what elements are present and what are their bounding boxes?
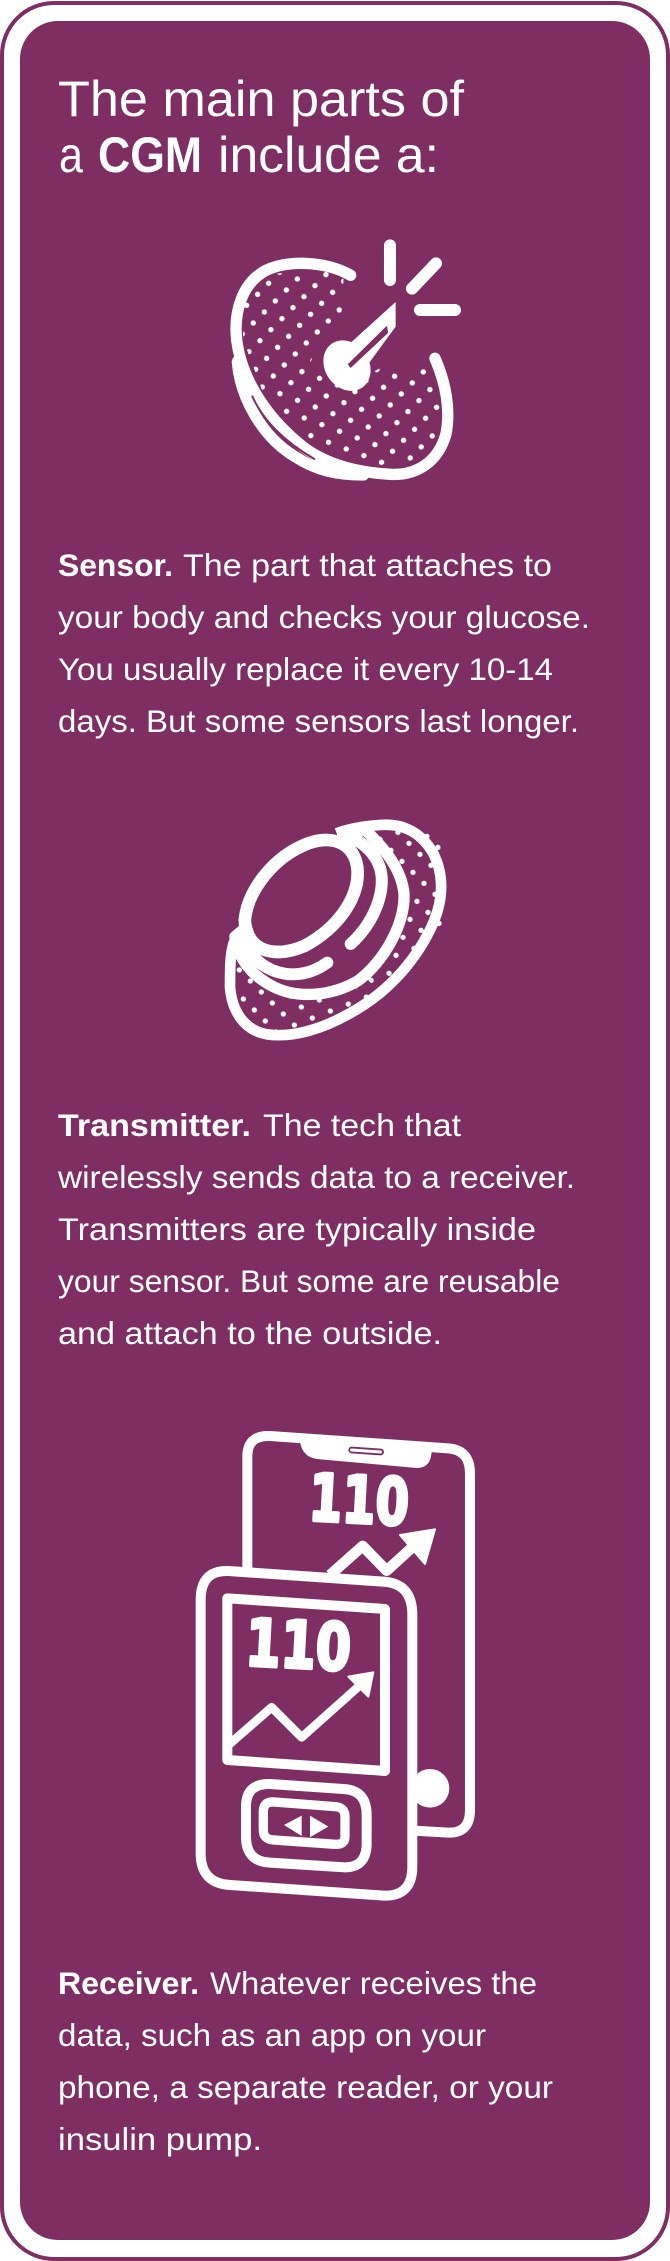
- text: sensor description: You usually replace it every 10-14: [58, 651, 553, 687]
- text: transmitter description: and attach to the outside.: [58, 1315, 442, 1351]
- text: receiver description: Whatever receives the: [210, 1965, 537, 2001]
- text: transmitter description: [57, 1107, 575, 1351]
- text: sensor description: Sensor.: [58, 547, 173, 583]
- text: receiver description: data, such as an app on your: [58, 2017, 486, 2053]
- icon: receiver and phone: [201, 1436, 470, 1896]
- text: transmitter description: your sensor. But some are reusable: [58, 1263, 560, 1299]
- text: receiver description: phone, a separate reader, or your: [58, 2069, 553, 2105]
- text: sensor description: your body and checks your glucose.: [58, 599, 590, 635]
- reader body: 110: [244, 1606, 353, 1686]
- title: a: [59, 127, 83, 183]
- text: transmitter description: The tech that: [263, 1107, 461, 1143]
- text: sensor description: [58, 547, 590, 739]
- icon: sensor: [236, 245, 455, 475]
- text: receiver description: insulin pump.: [58, 2121, 262, 2157]
- title: [58, 71, 464, 183]
- text: sensor description: days. But some sensors last longer.: [58, 703, 579, 739]
- title: The main parts of: [58, 71, 464, 127]
- title: CGM: [98, 127, 202, 183]
- icon: transmitter: [230, 825, 443, 1035]
- text: receiver description: [58, 1965, 553, 2157]
- phone body: [247, 1436, 470, 1833]
- text: transmitter description: Transmitters are typically inside: [58, 1211, 536, 1247]
- text: transmitter description: wirelessly sends data to a receiver.: [57, 1159, 575, 1195]
- text: receiver description: Receiver.: [58, 1965, 199, 2001]
- reader body: [201, 1571, 412, 1896]
- text: transmitter description: Transmitter.: [58, 1107, 251, 1143]
- text: sensor description: The part that attaches to: [183, 547, 552, 583]
- title: include a:: [218, 127, 439, 183]
- phone body: 110: [307, 1461, 411, 1541]
